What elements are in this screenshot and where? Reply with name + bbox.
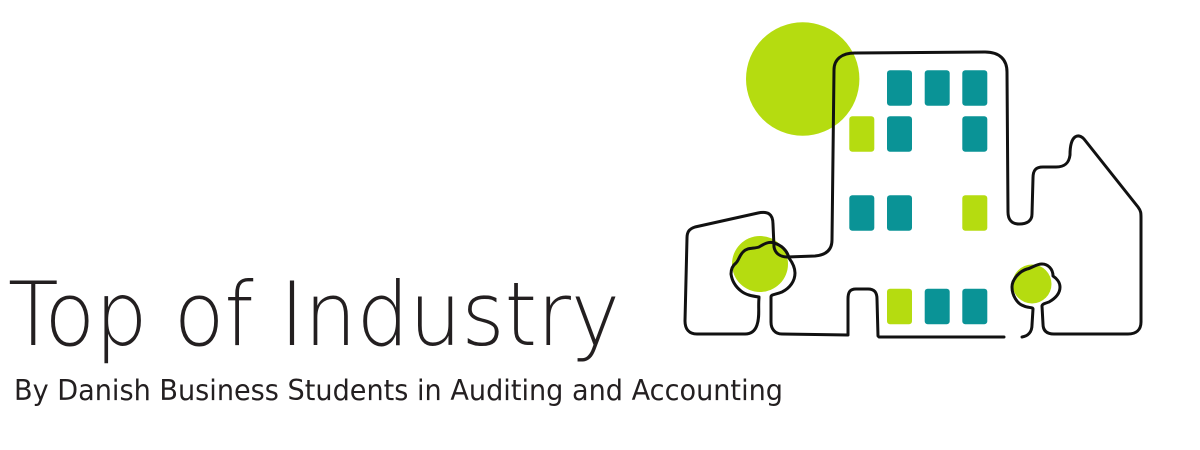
title: Top of Industry xyxy=(8,263,620,366)
icon: right tree lime circle xyxy=(1012,264,1052,304)
building outline line: base and lower tree xyxy=(731,242,1004,337)
illustration: buildings and trees xyxy=(685,22,1141,337)
icon: left tree lime circle xyxy=(732,236,788,292)
building outline line xyxy=(685,52,1141,337)
subtitle: By Danish Business Students in Auditing and Accounting xyxy=(14,374,783,407)
icon: large lime sun circle xyxy=(746,22,859,136)
windows grid xyxy=(849,70,987,324)
